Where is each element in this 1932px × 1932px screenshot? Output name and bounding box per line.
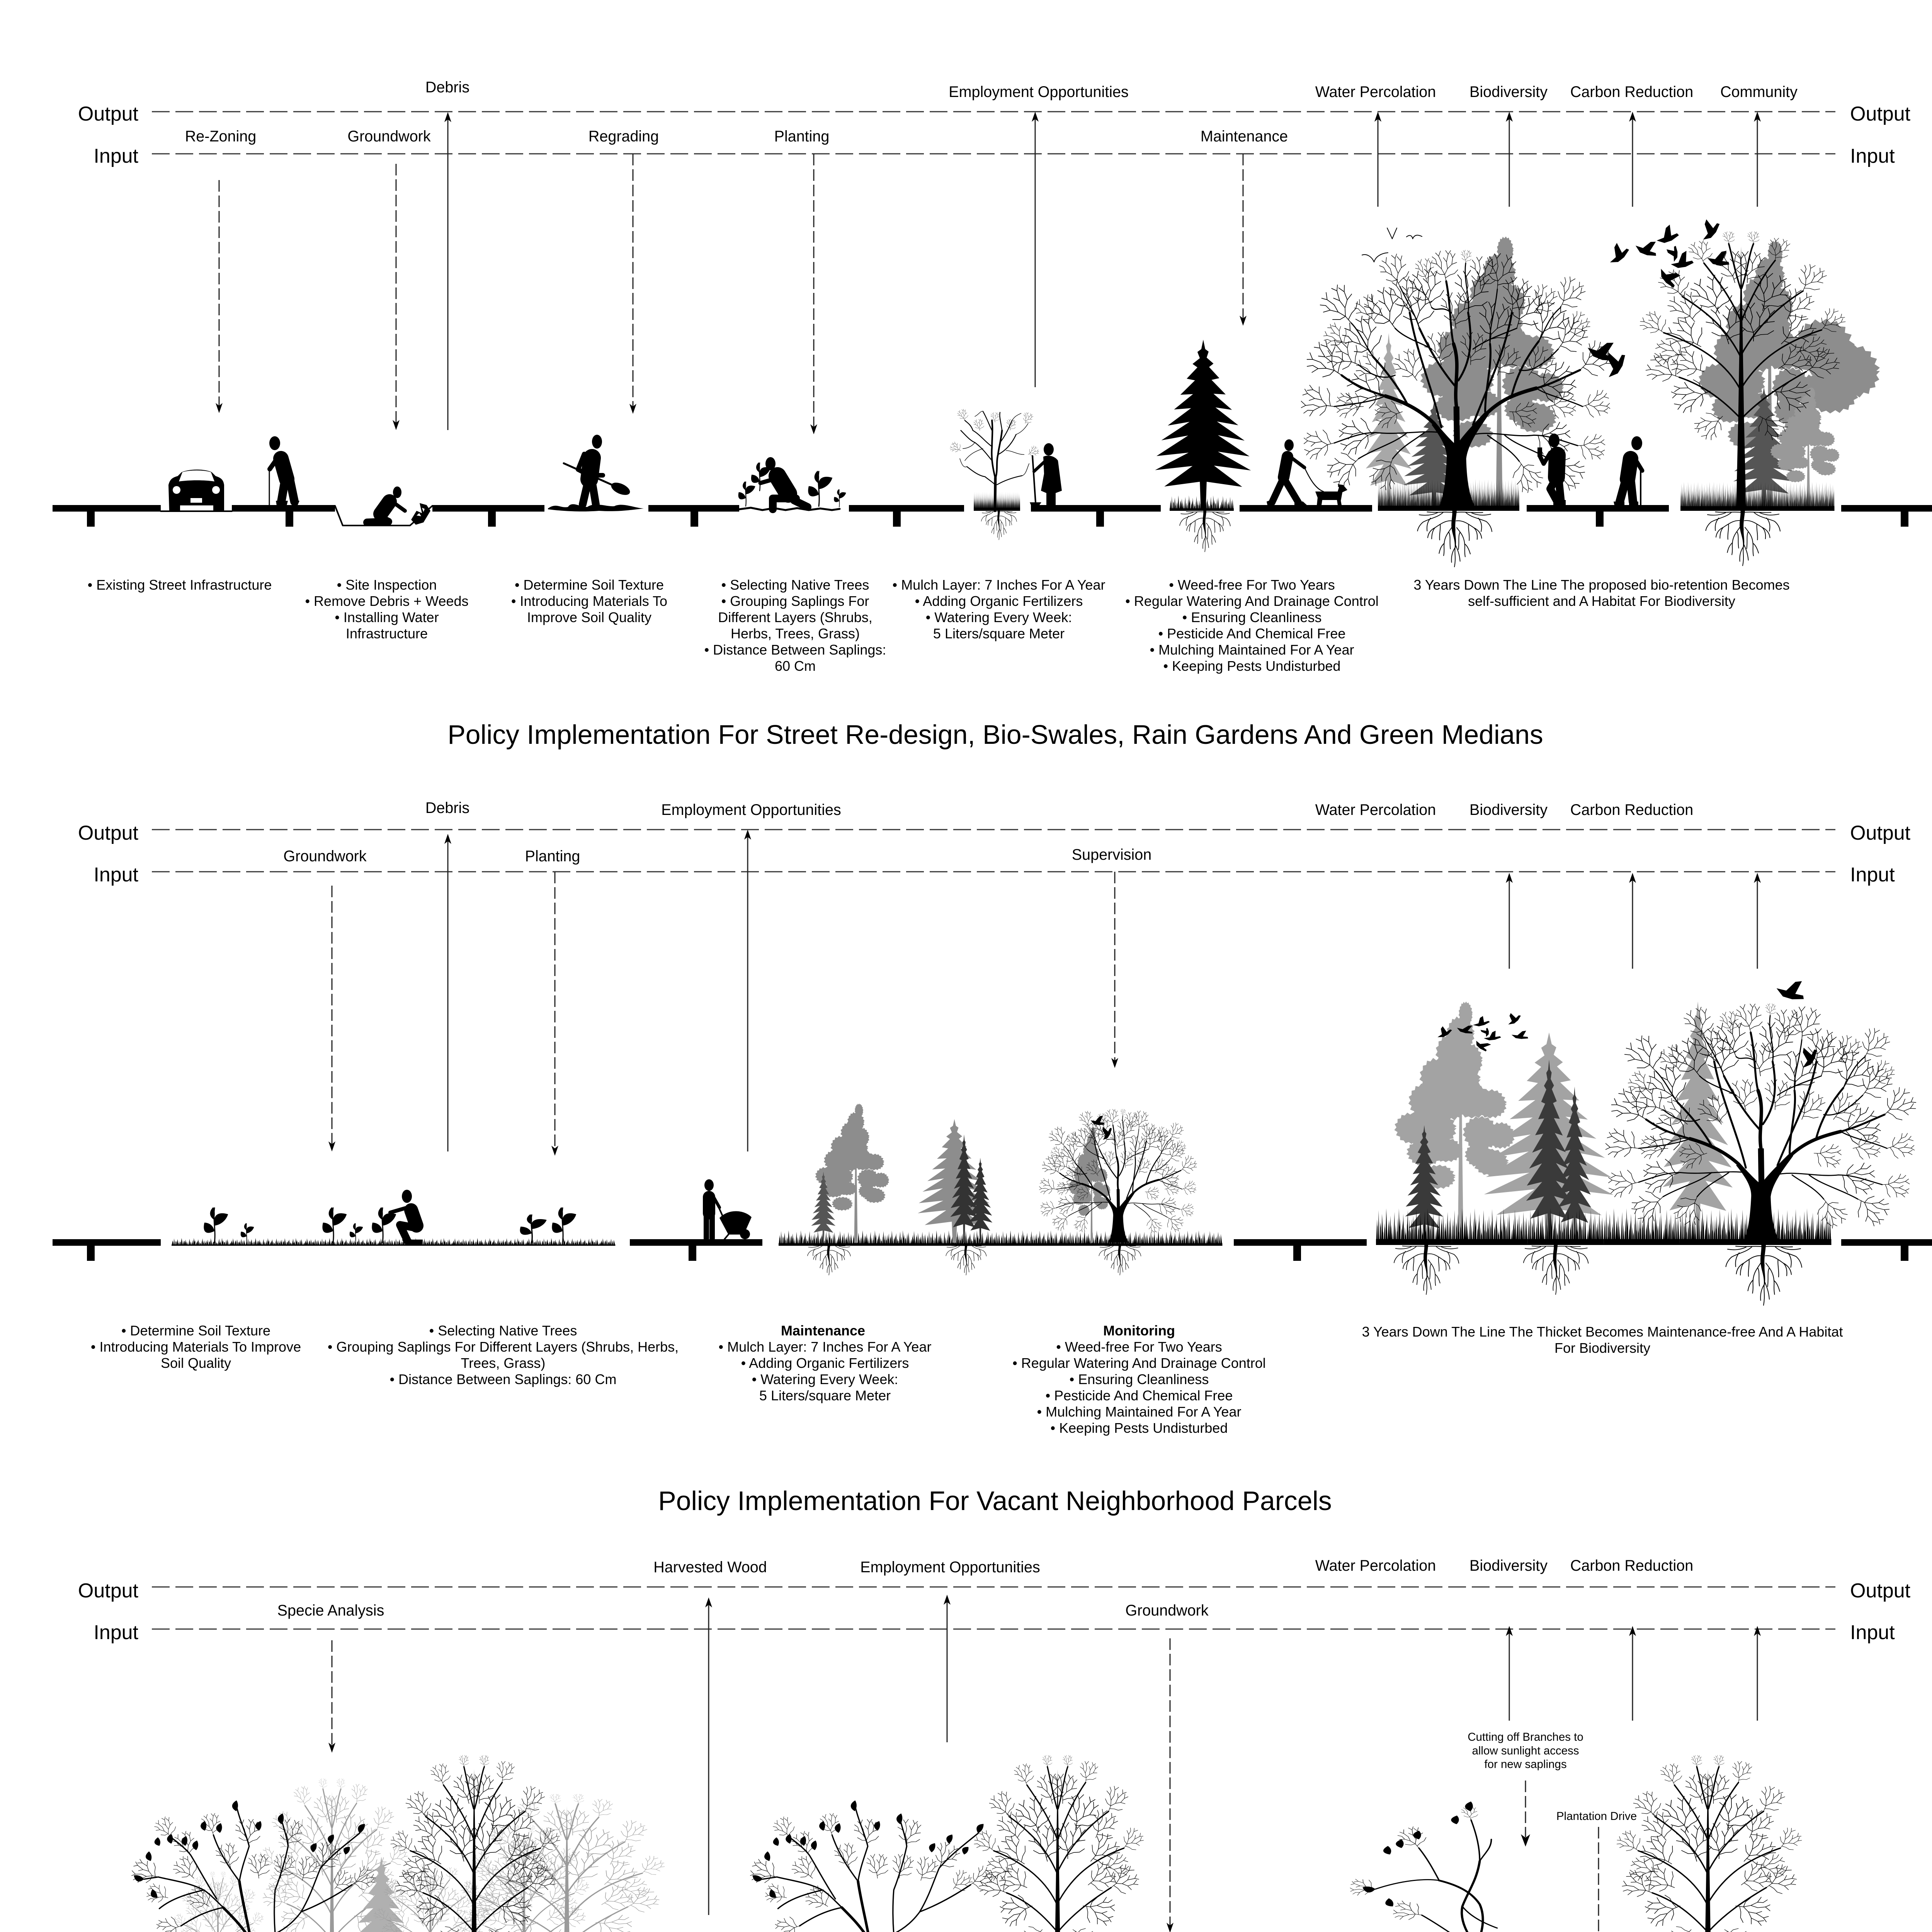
process labels: Specie Analysis [277,1602,384,1619]
section: re-wilding [53,1557,1932,1932]
step notes: • Introducing Materials To Improve [91,1339,301,1355]
process labels [283,799,1693,865]
process labels: Community [1720,83,1798,100]
process labels: Employment Opportunities [860,1559,1040,1576]
step notes: • Keeping Pests Undisturbed [1051,1420,1228,1436]
arrows [328,830,1761,1156]
removal grove [748,1755,1224,1932]
low grass strip [172,1238,615,1246]
figure: man with wheelbarrow [704,1179,752,1239]
step notes: • Mulching Maintained For A Year [1150,642,1354,658]
step notes: 5 Liters/square Meter [933,626,1065,641]
step notes: • Determine Soil Texture [515,577,664,593]
grove two: tall tree with grey trees [1636,232,1880,566]
title: street re-design: Policy Implementation For Street Re-design, Bio-Swales, Rain Gardens And Green Medians [447,719,1543,750]
step notes: • Existing Street Infrastructure [88,577,272,593]
figure: kneeling planter with saplings [736,457,847,510]
figure: crouching planter [390,1190,423,1245]
street ground segments [53,505,1932,527]
small bare tree with roots [949,408,1040,540]
step notes: self-sufficient and A Habitat For Biodiversity [1468,593,1735,609]
step notes [88,577,1790,674]
input output axis: Input [1850,145,1895,167]
process labels: Re-Zoning [185,128,256,145]
input output axis: Output [78,1580,139,1602]
single pine tree with roots [1155,340,1251,552]
process labels: Groundwork [347,128,431,145]
grass strip with young trees [779,1104,1222,1275]
arrows [216,112,1761,434]
step notes: • Watering Every Week: [926,609,1072,625]
birds [1090,971,1822,1141]
step notes: Soil Quality [161,1355,231,1371]
step notes: • Mulch Layer: 7 Inches For A Year [719,1339,931,1355]
plantation: mixed trees with invasive species marked [129,1755,668,1932]
step notes: • Keeping Pests Undisturbed [1163,658,1340,674]
figure: person with rake [1030,443,1062,505]
step notes: • Weed-free For Two Years [1056,1339,1222,1355]
step notes: • Regular Watering And Drainage Control [1125,593,1379,609]
input output axis: Output [1850,103,1911,125]
step notes: Monitoring [1103,1323,1175,1338]
step notes: • Watering Every Week: [752,1371,898,1387]
step notes: • Distance Between Saplings: [704,642,886,658]
saplings [200,1207,578,1243]
callout: plantation drive: Plantation Drive [1556,1810,1637,1823]
process labels [277,1557,1693,1619]
figure: man with bottle [1537,434,1566,505]
step notes: • Mulching Maintained For A Year [1037,1404,1241,1420]
section: street re-design [53,79,1932,674]
street ground segments [53,1239,1932,1261]
input output axis: Output [1850,822,1911,844]
process labels: Carbon Reduction [1570,1557,1693,1574]
step notes: • Introducing Materials To [511,593,667,609]
input output axis [78,103,1911,167]
step notes: • Adding Organic Fertilizers [741,1355,909,1371]
step notes: Improve Soil Quality [527,609,651,625]
process labels: Planting [525,848,580,865]
input output axis: Input [94,145,139,167]
step notes: Trees, Grass) [461,1355,545,1371]
step notes: • Determine Soil Texture [121,1323,270,1338]
callout: cutting branches: Cutting off Branches to [1468,1731,1583,1743]
step notes: • Pesticide And Chemical Free [1046,1388,1233,1403]
step notes: Infrastructure [346,626,428,641]
step notes: • Ensuring Cleanliness [1070,1371,1209,1387]
input output axis: Input [1850,1621,1895,1644]
callout: cutting branches: for new saplings [1484,1758,1567,1770]
title: vacant parcels: Policy Implementation For Vacant Neighborhood Parcels [658,1486,1332,1516]
callout: cutting branches: allow sunlight access [1472,1744,1579,1757]
process labels: Biodiversity [1469,801,1548,818]
process labels: Biodiversity [1469,83,1548,100]
pruned grove with saplings [1349,1755,1833,1932]
process labels: Carbon Reduction [1570,801,1693,818]
process labels: Debris [425,79,469,96]
arrows [328,1595,1761,1932]
figure: man with cane [269,436,299,505]
input output axis: Output [78,103,139,125]
step notes: • Selecting Native Trees [429,1323,577,1338]
step notes [91,1323,1843,1436]
process labels: Groundwork [1125,1602,1209,1619]
input output axis: Input [94,1621,139,1644]
step notes: • Remove Debris + Weeds [305,593,469,609]
process labels: Supervision [1072,846,1151,863]
process labels: Groundwork [283,848,367,865]
input output axis: Output [78,822,139,844]
process labels: Harvested Wood [653,1559,767,1576]
input output axis: Output [1850,1580,1911,1602]
process labels: Debris [425,799,469,816]
step notes: 5 Liters/square Meter [759,1388,891,1403]
step notes: Herbs, Trees, Grass) [731,626,860,641]
thicket: grey and dark trees [1376,1002,1920,1305]
process labels: Water Percolation [1315,1557,1436,1574]
icon: car [168,469,224,511]
process labels [185,79,1798,145]
figure: walker with dog [1267,439,1347,505]
input output axis [78,822,1911,886]
step notes: • Installing Water [335,609,439,625]
step notes: 3 Years Down The Line The Thicket Becomes Maintenance-free And A Habitat [1362,1324,1843,1340]
step notes: • Weed-free For Two Years [1169,577,1335,593]
process labels: Maintenance [1201,128,1288,145]
step notes: • Grouping Saplings For Different Layers (Shrubs, Herbs, [328,1339,679,1355]
step notes: 3 Years Down The Line The proposed bio-retention Becomes [1413,577,1790,593]
step notes: Maintenance [781,1323,865,1338]
input output axis: Input [1850,864,1895,886]
step notes: • Site Inspection [337,577,437,593]
process labels: Regrading [588,128,659,145]
process labels: Planting [774,128,829,145]
process labels: Water Percolation [1315,83,1436,100]
process labels: Water Percolation [1315,801,1436,818]
figure: man with shovel [548,435,644,512]
step notes: • Adding Organic Fertilizers [915,593,1083,609]
process labels: Employment Opportunities [661,801,841,818]
step notes: • Regular Watering And Drainage Control [1012,1355,1266,1371]
step notes: • Distance Between Saplings: 60 Cm [390,1371,616,1387]
step notes: For Biodiversity [1554,1340,1650,1356]
step notes: Different Layers (Shrubs, [718,609,872,625]
process labels: Carbon Reduction [1570,83,1693,100]
step notes: • Selecting Native Trees [721,577,869,593]
step notes: • Mulch Layer: 7 Inches For A Year [893,577,1105,593]
step notes: • Ensuring Cleanliness [1182,609,1321,625]
step notes: 60 Cm [775,658,816,674]
grove one: oak with grey trees [1298,236,1616,567]
figure: elderly man with cane [1614,436,1642,505]
input output axis [78,1580,1911,1644]
section: vacant parcels [53,799,1932,1436]
input output axis: Input [94,864,139,886]
figure: kneeling worker with rubble [367,486,430,525]
process labels: Employment Opportunities [949,83,1129,100]
step notes: • Grouping Saplings For [721,593,869,609]
birds [1362,215,1735,379]
step notes: • Pesticide And Chemical Free [1158,626,1345,641]
process labels: Biodiversity [1469,1557,1548,1574]
